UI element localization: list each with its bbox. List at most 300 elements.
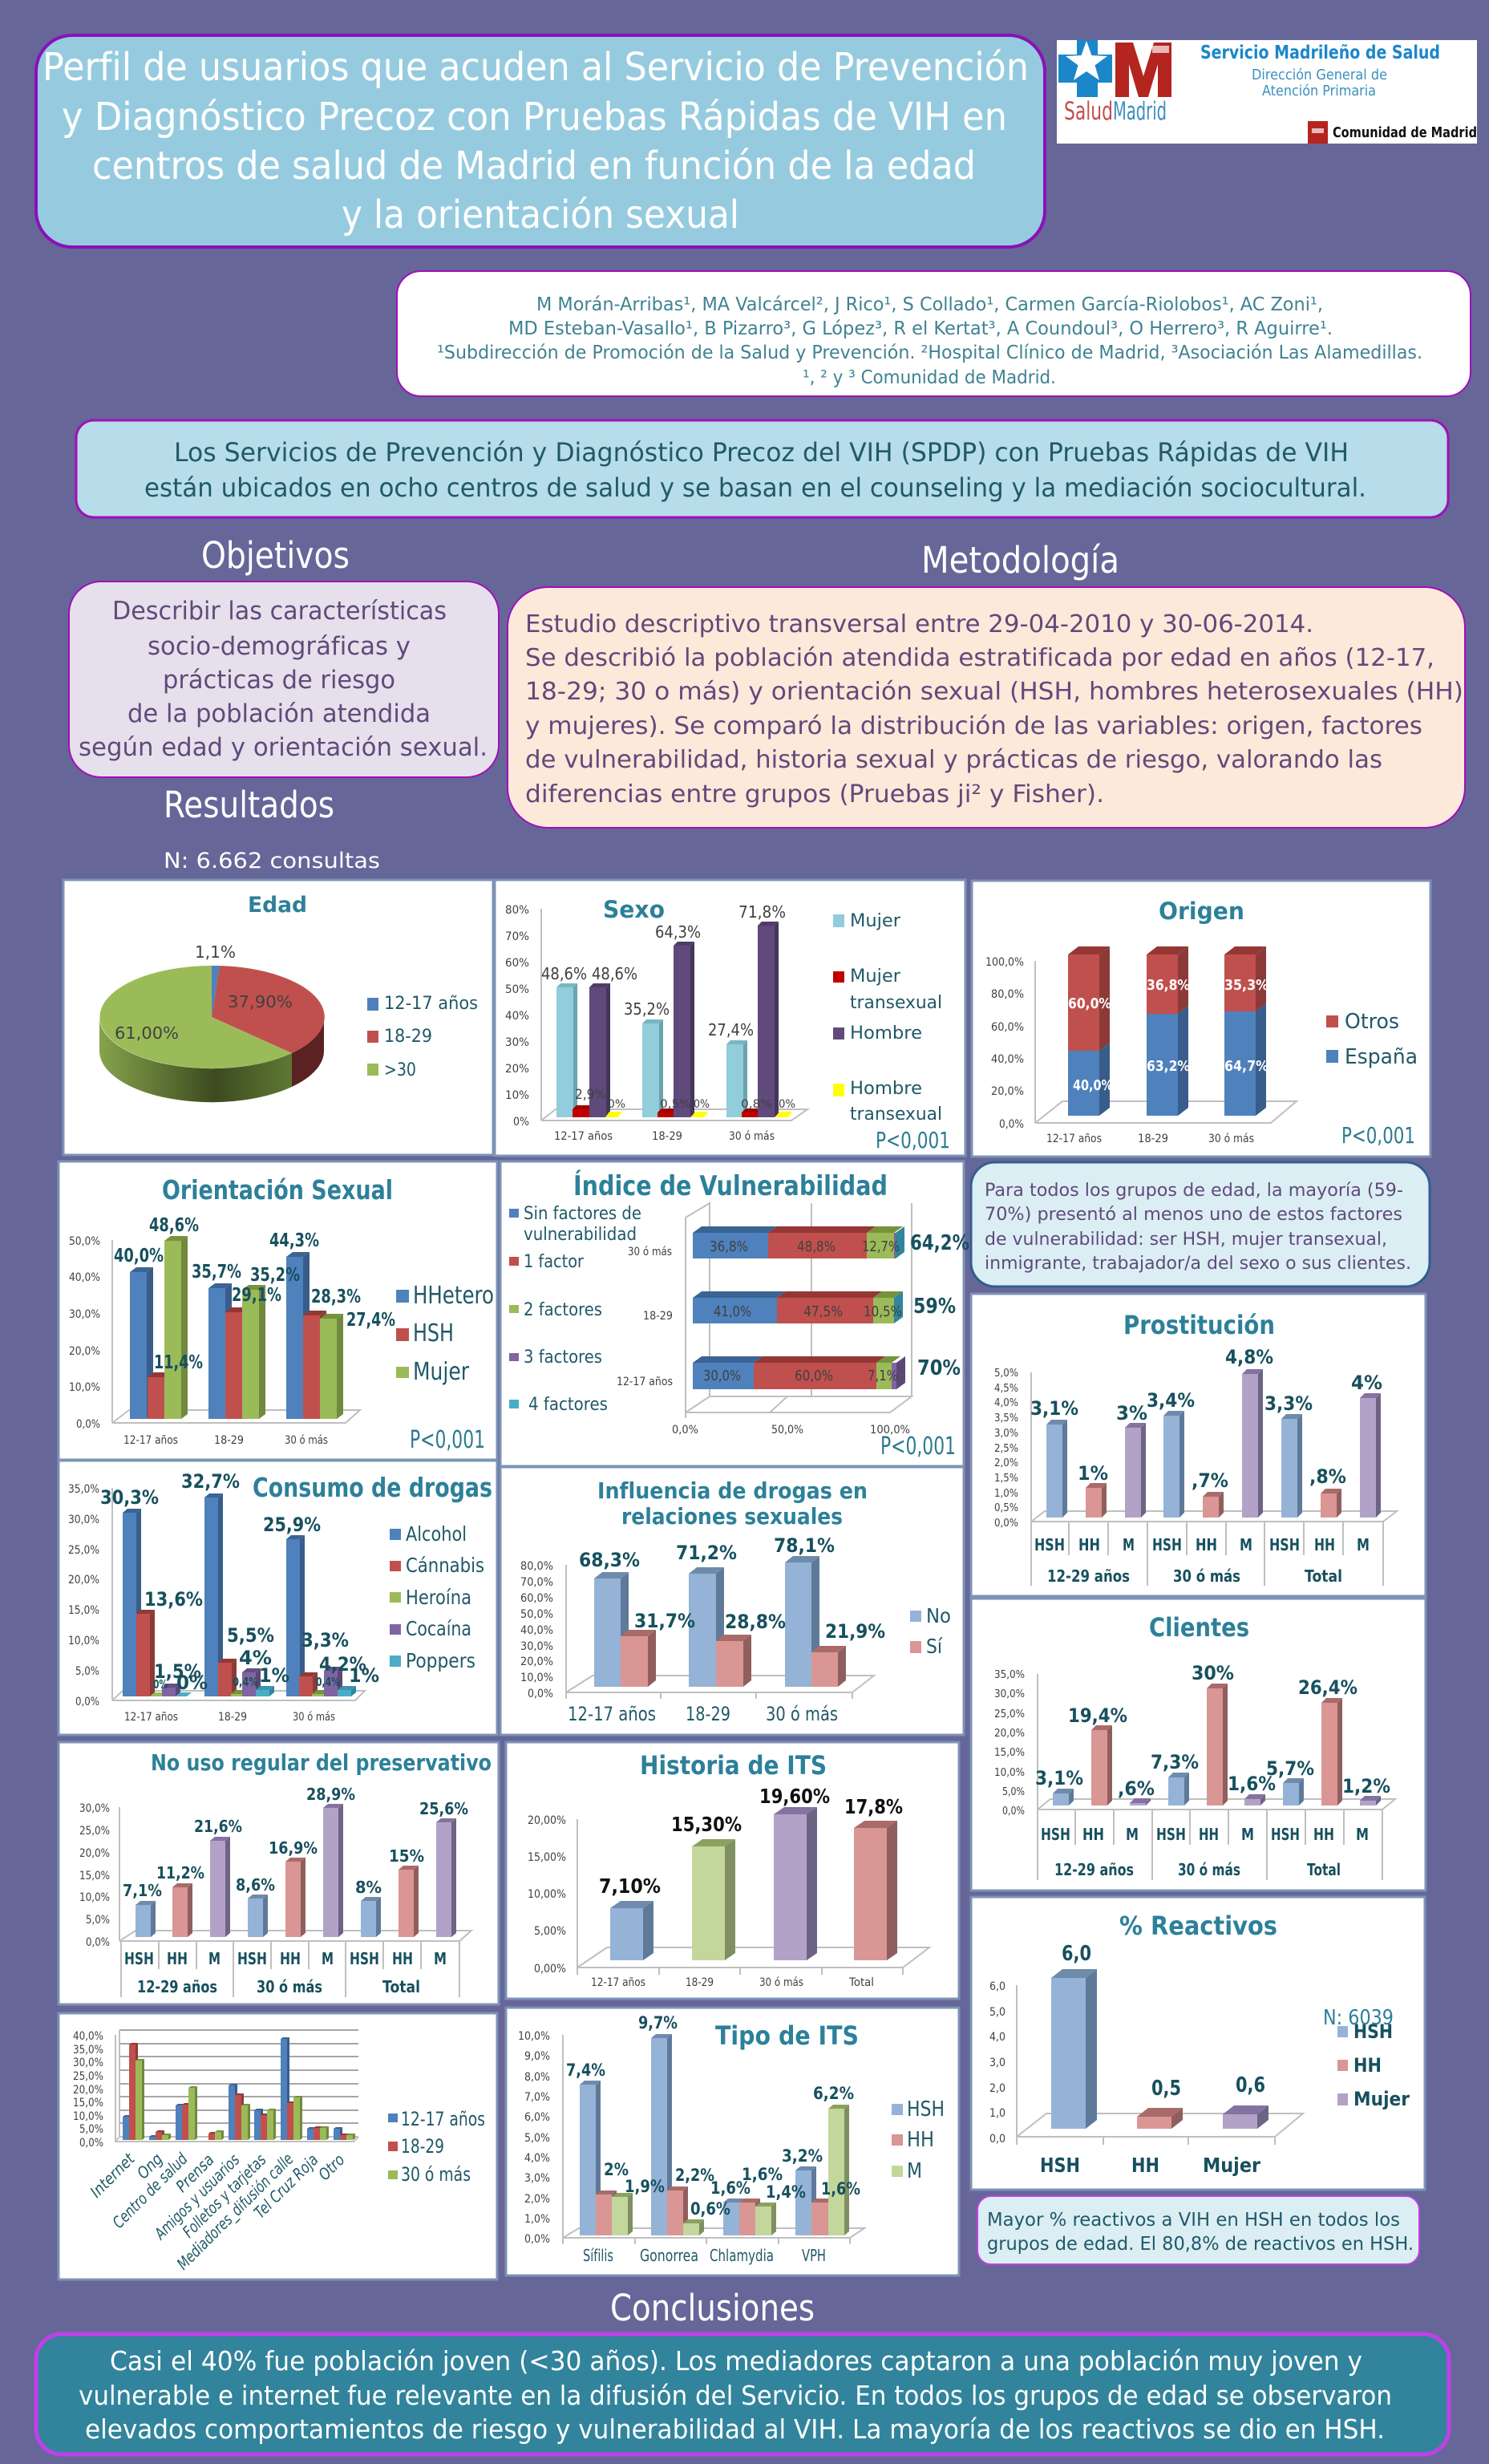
legend: HSH [413, 1319, 454, 1348]
data labels: 25,6% [419, 1799, 468, 1818]
data labels: 28,3% [311, 1287, 361, 1307]
bars [130, 1236, 343, 1419]
gridlines and axis: 5,0% [79, 2123, 103, 2136]
category labels: HH [1199, 1825, 1219, 1844]
panel: metodologia: de vulnerabilidad, historia sexual y prácticas de riesgo, valorando las [525, 746, 1382, 774]
data labels: 11,2% [156, 1863, 204, 1882]
axis: 30 ó más [729, 1130, 775, 1143]
axis: 20,0% [520, 1656, 553, 1668]
legend: 4 factores [528, 1395, 608, 1415]
legend: transexual [850, 1104, 942, 1125]
axis: 18-29 [643, 1310, 673, 1323]
data labels [114, 1215, 395, 1373]
callout: factores de vulnerabilidad: 70%) presentó al menos uno de estos factores [985, 1205, 1402, 1225]
axis: 30,0% [994, 1688, 1025, 1700]
data labels: 70% [917, 1356, 961, 1380]
axis: Total [848, 1976, 874, 1989]
axis: 3,0% [524, 2172, 550, 2185]
data labels: 59% [913, 1295, 956, 1319]
data labels: 8,6% [236, 1875, 275, 1895]
axis: 30,0% [68, 1514, 99, 1526]
category labels [1034, 1535, 1370, 1586]
gridlines and axis: 40,0% [73, 2030, 103, 2043]
legend: 3 factores [524, 1348, 602, 1368]
data labels: 2% [604, 2160, 629, 2179]
data labels: 25,9% [263, 1514, 321, 1536]
title: Prostitución [1123, 1310, 1275, 1340]
category labels: HSH [237, 1949, 267, 1968]
intro box: están ubicados en ocho centros de salud y se basan en el counseling y la mediación sociocultural. [144, 472, 1366, 503]
p value: P<0,001 [1341, 1122, 1415, 1149]
gridlines and axis: 10,0% [73, 2110, 103, 2123]
legend: HH [1353, 2054, 1382, 2077]
logos: Salud Madrid and Comunidad de Madrid: Madrid [1113, 97, 1167, 126]
data labels: 21,9% [825, 1620, 885, 1643]
legend: 18-29 [384, 1027, 432, 1047]
data labels: 1,9% [625, 2177, 665, 2196]
axis: 30 ó más [628, 1246, 672, 1258]
data labels [100, 1470, 379, 1694]
panel: objetivos: según edad y orientación sexual. [79, 733, 488, 762]
legend [390, 1522, 484, 1672]
gridlines and axis: 15,0% [73, 2097, 103, 2109]
data labels: 0% [153, 1677, 168, 1692]
title: No uso regular del preservativo [151, 1749, 492, 1776]
category labels: M [1126, 1825, 1139, 1844]
axis: 30 ó más [1208, 1133, 1254, 1145]
data labels: 78,1% [774, 1534, 835, 1557]
axis: 3,0 [989, 2057, 1005, 2069]
axis: 50,0% [520, 1608, 553, 1621]
axis: 60,0% [520, 1592, 553, 1605]
data labels: 3,4% [1147, 1389, 1195, 1412]
axis: 0,0% [76, 1418, 100, 1431]
data labels: 0,5% [660, 1098, 691, 1111]
category labels: HH [280, 1949, 301, 1968]
data labels [1062, 1942, 1265, 2101]
category labels: 30 ó más [1173, 1566, 1240, 1586]
data labels: 27,4% [346, 1310, 395, 1331]
heading: Conclusiones: Conclusiones [610, 2287, 815, 2329]
axis: 10,0% [79, 1891, 110, 1904]
category labels: HH [392, 1949, 413, 1968]
data labels: 0,8% [741, 1098, 772, 1111]
data labels: 1,4% [766, 2182, 806, 2202]
callout: factores de vulnerabilidad [971, 1162, 1430, 1287]
legend: 12-17 años [401, 2108, 485, 2130]
gridlines and axis: 30,0% [73, 2057, 103, 2069]
gridlines and axis: 0,0% [79, 2137, 103, 2150]
title box [36, 35, 1045, 247]
panel: metodologia: Se describió la población atendida estratificada por edad en años (12-17, [525, 644, 1434, 672]
axis: 0,0% [994, 1518, 1018, 1530]
p value: P<0,001 [876, 1127, 950, 1153]
axis: Chlamydia [710, 2246, 774, 2265]
axis: 15,0% [79, 1870, 110, 1882]
legend: Mujer [850, 967, 901, 987]
title box: y la orientación sexual [342, 192, 739, 237]
axis: 18-29 [1138, 1133, 1168, 1145]
legend: Sí [926, 1635, 943, 1658]
axis: 30 ó más [293, 1711, 335, 1724]
rotated category labels: Ong [133, 2150, 167, 2182]
data labels: 30,0% [703, 1368, 741, 1384]
axis: 4,0% [524, 2152, 550, 2165]
data labels: 4,2% [319, 1653, 366, 1676]
axis: 35,0% [994, 1669, 1025, 1681]
axis: Gonorrea [640, 2246, 698, 2265]
category labels: HH [1313, 1825, 1334, 1844]
legend: Cocaína [406, 1617, 471, 1640]
data labels: 2,2% [675, 2166, 714, 2185]
axis: 25,0% [68, 1544, 99, 1557]
chart: Edad pie [63, 880, 493, 1155]
data labels: 48,6% [149, 1215, 199, 1236]
data labels: 41,0% [714, 1303, 751, 1320]
axis: 5,0% [75, 1665, 99, 1678]
logos: Salud Madrid and Comunidad de Madrid: Dirección General de [1252, 67, 1387, 83]
data labels: 1,6% [710, 2178, 751, 2198]
bars [594, 1556, 846, 1687]
axis: 10,0% [994, 1767, 1025, 1779]
legend [910, 1604, 951, 1658]
axis: 25,0% [79, 1825, 110, 1838]
category labels: M [434, 1949, 447, 1968]
legend: No [926, 1604, 951, 1627]
legend: Mujer [850, 911, 901, 931]
data labels: 31,7% [634, 1610, 695, 1632]
callout: factores de vulnerabilidad: de vulnerabilidad: ser HSH, mujer transexual, [985, 1230, 1387, 1250]
axis: 80% [505, 904, 529, 917]
axis: 6,0% [524, 2111, 550, 2124]
data labels: 30% [1192, 1662, 1234, 1684]
axis: 9,0% [524, 2050, 550, 2063]
data labels: 1,6% [821, 2179, 860, 2199]
panel: conclusiones [36, 2334, 1449, 2454]
legend: M [907, 2159, 922, 2183]
axis [994, 1368, 1397, 1586]
title: Tipo de ITS [715, 2020, 859, 2051]
axis: 0,5% [994, 1502, 1018, 1514]
data labels [579, 1534, 885, 1643]
data labels: 35,2% [250, 1265, 300, 1286]
axis [68, 1483, 365, 1724]
data labels: 40,0% [114, 1246, 164, 1266]
legend: Hombre [850, 1079, 922, 1099]
data labels: 35,7% [192, 1262, 241, 1283]
axis: 12-17 años [124, 1711, 178, 1724]
logos: Salud Madrid and Comunidad de Madrid: Servicio Madrileño de Salud [1200, 43, 1440, 63]
data labels: 6,0 [1062, 1942, 1091, 1966]
axis: 80,0% [991, 988, 1024, 1001]
data labels: 1,2% [1342, 1775, 1390, 1797]
axis: 50,0% [771, 1424, 803, 1437]
rotated category labels: Otro [314, 2150, 349, 2184]
axis: 100,0% [870, 1424, 910, 1437]
data labels: 29,1% [232, 1285, 281, 1306]
pie labels: 37,90% [228, 992, 293, 1011]
chart: Influencia de drogas [500, 1467, 964, 1735]
data labels [1030, 1346, 1382, 1492]
data labels: 0,4% [316, 1675, 340, 1689]
data labels: 7,1% [123, 1881, 162, 1900]
axis: 20,0% [69, 1345, 100, 1358]
category labels: 12-29 años [137, 1977, 217, 1996]
title box: centros de salud de Madrid en función de la edad [92, 144, 976, 188]
data labels: 71,8% [738, 902, 786, 922]
legend [396, 1282, 494, 1386]
data labels: 71,2% [676, 1542, 737, 1564]
axis: 10,0% [68, 1635, 99, 1647]
category labels: M [208, 1949, 221, 1968]
axis: 0% [513, 1116, 529, 1129]
bars [580, 2034, 849, 2235]
axis: 1,0% [524, 2213, 550, 2226]
title: Sexo [603, 896, 665, 923]
chart: Consumo de drogas [59, 1461, 497, 1735]
chart: % Reactivos [971, 1897, 1425, 2190]
axis: 25,0% [994, 1708, 1025, 1720]
data labels: 3,3% [301, 1629, 349, 1651]
data labels: 10,5% [864, 1303, 902, 1320]
data labels: 64,2% [910, 1231, 969, 1255]
legend: Mujer [1353, 2088, 1410, 2110]
axis: 50% [505, 983, 529, 996]
rotated category labels: Folletos y tarjetas [179, 2150, 270, 2241]
panel: objetivos: prácticas de riesgo [163, 666, 395, 695]
bars [123, 1493, 356, 1696]
data labels: 3% [1116, 1402, 1147, 1424]
category labels: HH [167, 1949, 188, 1968]
axis: 70,0% [520, 1576, 553, 1589]
data labels: 17,8% [844, 1795, 903, 1818]
category labels: M [1357, 1535, 1370, 1554]
axis: 20,0% [994, 1728, 1025, 1740]
data labels: 5,7% [1266, 1757, 1314, 1780]
callout: reactivos [977, 2196, 1419, 2264]
data labels: 48,6% [592, 964, 637, 983]
axis: 20,0% [991, 1085, 1024, 1098]
data labels: 0% [779, 1098, 795, 1111]
axis: 5,0% [86, 1914, 110, 1927]
panel: metodologia: y mujeres). Se comparó la distribución de las variables: origen, factores [525, 712, 1422, 740]
axis: 18-29 [214, 1434, 244, 1447]
axis: 0,0% [1002, 1805, 1025, 1818]
axis: 12-17 años [123, 1434, 178, 1447]
data labels: 3,2% [782, 2146, 823, 2166]
category labels: Total [1305, 1566, 1342, 1586]
data labels: 21,6% [194, 1817, 242, 1836]
data labels: 60,0% [1068, 995, 1111, 1012]
title: Influencia de drogas en [597, 1477, 868, 1504]
data labels: 1,5% [154, 1660, 201, 1683]
panel: conclusiones: vulnerable e internet fue relevante en la difusión del Servicio. En todos los grupos de edad se observaron [79, 2380, 1392, 2411]
data labels: 1% [349, 1664, 379, 1687]
legend: Otros [1345, 1010, 1399, 1034]
bars [556, 922, 792, 1117]
axis: HH [1131, 2154, 1159, 2177]
data labels: ,6% [1118, 1777, 1155, 1800]
category labels: M [1240, 1535, 1252, 1554]
pie labels: 61,00% [115, 1023, 179, 1043]
title: Índice de Vulnerabilidad [573, 1169, 888, 1202]
legend: Poppers [406, 1649, 475, 1672]
data labels: 4% [1351, 1372, 1382, 1394]
pie labels: 1,1% [195, 942, 236, 962]
data labels: 19,60% [759, 1785, 830, 1808]
legend: HHetero [413, 1282, 494, 1310]
legend: Heroína [406, 1586, 471, 1609]
category labels: 30 ó más [257, 1977, 322, 1996]
panel: metodologia: Estudio descriptivo transversal entre 29-04-2010 y 30-06-2014. [525, 610, 1313, 638]
legend [892, 2097, 945, 2183]
category labels: HSH [1156, 1825, 1186, 1844]
rotated category labels [86, 2149, 349, 2273]
bars [1051, 1969, 1268, 2129]
data labels: 60,0% [795, 1368, 833, 1384]
rotated category labels: Prensa [172, 2150, 218, 2196]
data labels: 11,4% [154, 1352, 203, 1373]
data labels: ,7% [1192, 1469, 1228, 1492]
legend [833, 911, 942, 1125]
legend [367, 994, 478, 1080]
title: Clientes [1149, 1612, 1249, 1643]
axis: 20,00% [528, 1814, 566, 1827]
axis: 12-17 años [568, 1703, 656, 1725]
axis [520, 1560, 874, 1725]
category labels: 30 ó más [1178, 1860, 1240, 1879]
axis: 5,0% [1002, 1786, 1025, 1798]
axis: 0,0% [672, 1424, 698, 1437]
data labels: 36,8% [710, 1238, 748, 1255]
axis: 1,0% [994, 1488, 1018, 1500]
axis [994, 1669, 1395, 1880]
panel: objetivos: de la población atendida [127, 699, 431, 728]
axis: 2,0 [989, 2082, 1005, 2095]
chart: Tipo de ITS [506, 2008, 959, 2276]
rotated category labels: Internet [86, 2149, 139, 2202]
data labels: 5,5% [227, 1624, 274, 1647]
data labels: 44,3% [269, 1230, 319, 1251]
bars [136, 1804, 456, 1937]
data labels: 0,6 [1236, 2073, 1265, 2097]
axis: 40,0% [991, 1053, 1024, 1066]
axis: 0,0% [528, 1688, 553, 1700]
legend: vulnerabilidad [524, 1225, 637, 1245]
title: Edad [248, 893, 307, 918]
legend: HSH [1353, 2020, 1393, 2043]
axis: 30% [505, 1036, 529, 1049]
title: Historia de ITS [640, 1750, 827, 1781]
axis: 0,0 [989, 2133, 1005, 2146]
chart: Clientes [971, 1599, 1426, 1891]
data labels: 16,9% [269, 1838, 318, 1858]
axis: 10,0% [69, 1381, 100, 1394]
gridlines and axis: 20,0% [73, 2084, 103, 2097]
data labels: 40,0% [1073, 1077, 1113, 1094]
axis: 30,0% [79, 1802, 110, 1815]
axis: 0,0% [86, 1936, 110, 1949]
axis: 2,0% [524, 2193, 550, 2206]
callout: factores de vulnerabilidad: Para todos los grupos de edad, la mayoría (59- [985, 1181, 1403, 1201]
axis [985, 956, 1297, 1145]
axis: 60% [505, 957, 529, 970]
title: Consumo de drogas [253, 1472, 492, 1503]
data labels: 1% [1078, 1462, 1108, 1485]
panel: metodologia: 18-29; 30 o más) y orientación sexual (HSH, hombres heterosexuales (HH) [525, 678, 1463, 706]
data labels: 47,5% [803, 1303, 843, 1320]
axis: 5,0% [524, 2132, 550, 2145]
category labels: HH [1196, 1535, 1217, 1554]
category labels: Total [1307, 1860, 1341, 1879]
axis: 20% [505, 1063, 529, 1076]
sample size: N: 6.662 consultas [164, 849, 380, 873]
data labels: 8% [355, 1878, 382, 1897]
data labels: 0% [176, 1672, 208, 1694]
data labels: 35,2% [624, 999, 670, 1019]
axis: 3,5% [994, 1412, 1018, 1424]
data labels: 0% [608, 1098, 625, 1111]
legend: HH [907, 2128, 934, 2152]
chart: Sexo [495, 880, 965, 1156]
axis [518, 2030, 864, 2265]
legend: 18-29 [401, 2135, 444, 2158]
axis: Mujer [1203, 2154, 1261, 2177]
category labels: HSH [1041, 1825, 1070, 1844]
data labels [599, 1785, 903, 1898]
panel: metodologia: diferencias entre grupos (Pruebas ji² y Fisher). [525, 780, 1104, 808]
axis: 18-29 [686, 1976, 714, 1989]
panel: objetivos: Describir las características [112, 597, 447, 626]
authors box: ¹Subdirección de Promoción de la Salud y Prevención. ²Hospital Clínico de Madrid, ³Asociación Las Alamedillas. [437, 342, 1422, 363]
axis: 0,0% [75, 1696, 99, 1708]
data labels [1068, 977, 1268, 1094]
legend [388, 2108, 485, 2186]
chart: No uso regular del preservativo [59, 1742, 499, 2004]
axis: 3,0% [994, 1428, 1018, 1440]
axis: Sífilis [583, 2246, 613, 2265]
axis [79, 1802, 471, 1997]
legend: transexual [850, 993, 942, 1013]
axis: 4,0 [989, 2031, 1005, 2044]
category labels: HSH [350, 1949, 379, 1968]
data labels: 3,3% [1264, 1392, 1313, 1415]
data labels: 48,6% [541, 964, 587, 983]
axis: 40% [505, 1010, 529, 1023]
axis: 12-17 años [554, 1130, 613, 1143]
data labels [703, 1231, 969, 1384]
panel: metodologia [508, 587, 1465, 828]
data labels: 35,3% [1224, 977, 1268, 994]
axis: 4,5% [994, 1383, 1018, 1395]
axis: VPH [802, 2246, 826, 2265]
legend [1337, 2020, 1410, 2110]
data labels: 9,7% [638, 2013, 678, 2032]
axis: 35,0% [68, 1483, 99, 1496]
axis: 18-29 [686, 1703, 730, 1725]
heading: Objetivos: Objetivos [201, 534, 350, 577]
callout: reactivos: grupos de edad. El 80,8% de reactivos en HSH. [987, 2234, 1414, 2255]
axis: 15,00% [528, 1851, 566, 1864]
category labels: M [1123, 1535, 1135, 1554]
axis: 30,0% [520, 1640, 553, 1653]
title box: y Diagnóstico Precoz con Pruebas Rápidas de VIH en [62, 95, 1007, 140]
gridlines and axis: 35,0% [73, 2044, 103, 2057]
logos: Salud Madrid and Comunidad de Madrid: Atención Primaria [1262, 83, 1376, 99]
icon: red M [1115, 43, 1171, 97]
axis: 30 ó más [766, 1703, 838, 1725]
panel: conclusiones: elevados comportamientos de riesgo y vulnerabilidad al VIH. La mayoría de los reactivos se dio en HSH. [85, 2413, 1385, 2445]
